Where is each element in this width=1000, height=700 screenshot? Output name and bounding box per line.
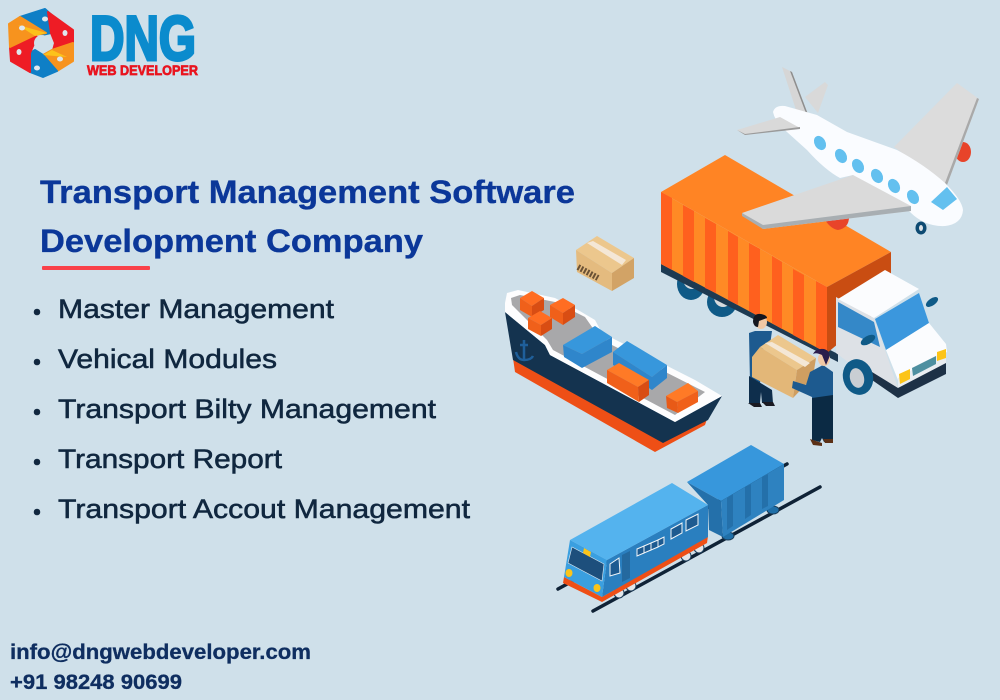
cab body xyxy=(836,297,898,388)
feature list: Transport Bilty Management xyxy=(58,394,437,424)
illustration: airplane xyxy=(737,67,979,234)
locomotive skirt xyxy=(563,536,708,602)
headlights xyxy=(899,349,946,384)
vertical tail fins xyxy=(782,67,828,117)
blue container two xyxy=(613,341,667,390)
locomotive front xyxy=(564,540,607,597)
headlights xyxy=(566,548,600,592)
worker left xyxy=(748,314,775,407)
cargo cube one xyxy=(520,291,544,317)
box label marks xyxy=(578,267,598,278)
cargo cube two xyxy=(550,298,575,325)
near engine xyxy=(825,217,849,230)
deck floor xyxy=(511,295,705,415)
windshield xyxy=(875,293,929,350)
front wheel xyxy=(839,356,877,398)
feature list: Vehical Modules xyxy=(58,344,277,374)
far engine xyxy=(955,142,971,162)
locomotive door xyxy=(622,551,630,582)
hood xyxy=(886,323,947,380)
illustration: loose cardboard box xyxy=(576,236,634,291)
logo wordmark: DNG xyxy=(90,4,196,74)
feature list: Master Management xyxy=(58,294,335,324)
windows xyxy=(811,134,957,210)
windshield xyxy=(568,547,604,581)
title: Transport Management Software xyxy=(40,174,575,210)
hull xyxy=(505,312,722,443)
illustration: workers carrying box xyxy=(748,314,833,446)
cab front panel xyxy=(898,350,946,390)
grille xyxy=(912,356,936,376)
container ribs xyxy=(661,192,827,353)
hull bottom xyxy=(513,358,708,452)
title: Development Company xyxy=(40,223,423,259)
illustration: cargo ship xyxy=(505,290,722,452)
orange container rear xyxy=(666,383,698,413)
carried box xyxy=(752,335,816,398)
fuselage xyxy=(773,106,963,226)
locomotive side xyxy=(602,505,708,597)
feature list: Transport Accout Management xyxy=(58,494,471,524)
anchor icon xyxy=(516,340,533,360)
near wing xyxy=(742,175,911,229)
container side xyxy=(661,192,827,353)
orange container xyxy=(607,363,649,402)
worker right xyxy=(792,349,833,446)
far wing xyxy=(894,83,979,185)
title underline xyxy=(42,266,150,270)
container top xyxy=(661,155,891,287)
landing gear xyxy=(916,222,926,234)
tailplane xyxy=(737,117,800,135)
locomotive side windows xyxy=(610,514,698,576)
front rail xyxy=(593,487,820,611)
illustration: delivery truck xyxy=(661,155,947,398)
truck rear wheels xyxy=(677,268,737,317)
contact details xyxy=(10,641,311,694)
title xyxy=(40,174,575,259)
feature list xyxy=(34,294,471,524)
mirrors xyxy=(859,295,940,347)
cargo cube three xyxy=(528,311,552,336)
logo tagline: WEB DEVELOPER xyxy=(87,62,198,78)
truck chassis xyxy=(661,264,838,362)
logo: DNG Web Developer xyxy=(9,4,198,78)
rear rail xyxy=(558,464,787,589)
icon: hexagon pinwheel xyxy=(9,9,73,77)
illustration: train xyxy=(558,445,820,611)
side window xyxy=(838,302,880,347)
deck rim xyxy=(505,290,722,422)
train wheels xyxy=(614,506,779,598)
feature list: Transport Report xyxy=(58,444,283,474)
bumper xyxy=(872,363,946,398)
wagon xyxy=(687,445,784,537)
contact details: +91 98248 90699 xyxy=(10,671,182,694)
cab roof xyxy=(838,270,919,318)
locomotive roof xyxy=(570,483,708,560)
blue container one xyxy=(563,326,612,368)
container front xyxy=(827,252,891,353)
contact details: info@dngwebdeveloper.com xyxy=(10,641,311,664)
